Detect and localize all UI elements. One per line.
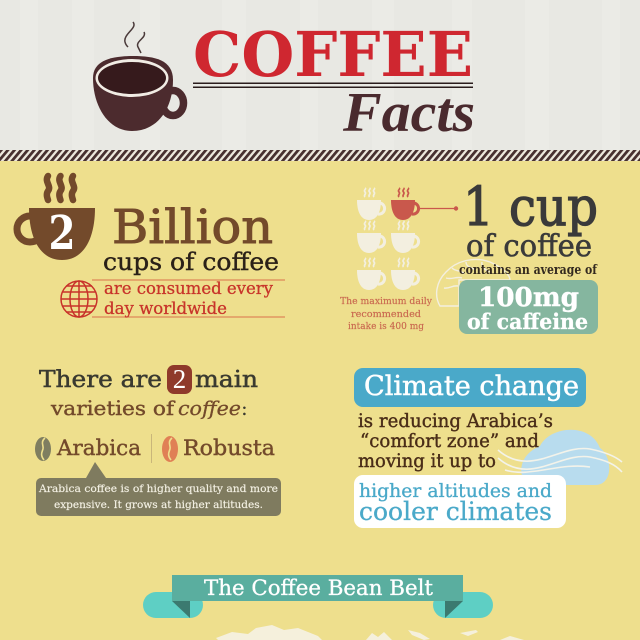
- text: varieties of coffee: :: [241, 396, 248, 420]
- callout: Arabica description: [36, 462, 281, 516]
- heading: There are 2 main: There are: [39, 367, 162, 393]
- text: reducing comfort zone: [358, 410, 553, 472]
- connector arrow: [420, 206, 458, 211]
- panel: 2 billion cups: [17, 176, 285, 319]
- icon: brown cup with number 2: [17, 176, 95, 261]
- banner: The Coffee Bean Belt: [143, 575, 493, 618]
- heading: There are 2 main: 2: [173, 364, 186, 394]
- icon: robusta bean: [162, 436, 178, 462]
- rules: [92, 280, 285, 317]
- callout: 100mg of caffeine: [459, 280, 598, 334]
- text: varieties of coffee: varieties of: [50, 396, 176, 420]
- text: varieties of coffee: coffee: [178, 396, 241, 420]
- text: reducing comfort zone: is reducing Arabica’s: [358, 410, 553, 432]
- text: are consumed every day worldwide: day worldwide: [104, 299, 227, 319]
- hatched divider: [0, 150, 640, 161]
- title: Facts: Facts: [342, 82, 475, 144]
- text: of coffee: of coffee: [466, 229, 592, 264]
- text: reducing comfort zone: “comfort zone” and: [360, 430, 539, 452]
- panel: 1 cup of coffee: [340, 177, 598, 334]
- text: are consumed every day worldwide: are consumed every: [104, 279, 273, 299]
- header band: [0, 0, 640, 150]
- icon: brown cup with number 2: 2: [48, 206, 76, 261]
- callout: higher altitudes: higher altitudes and: [359, 480, 552, 502]
- text: are consumed every day worldwide: [104, 279, 273, 319]
- heading: 1 cup: 1 cup: [463, 177, 598, 238]
- panel: climate change: [354, 368, 622, 528]
- world map: [216, 625, 524, 640]
- panel: 2 main varieties: [35, 364, 281, 516]
- text: maximum daily intake: The maximum daily: [340, 297, 433, 307]
- icon: brain outline: [437, 259, 510, 306]
- text: contains an average of: contains an average of: [459, 263, 598, 278]
- text: varieties of coffee: [50, 396, 248, 420]
- callout: higher altitudes: [354, 475, 566, 528]
- callout: higher altitudes: cooler climates: [359, 497, 552, 526]
- text: maximum daily intake: [340, 297, 433, 332]
- callout: 100mg of caffeine: 100mg: [478, 283, 579, 313]
- heading: There are 2 main: [39, 364, 258, 394]
- icon: globe: [61, 281, 97, 317]
- icon: six cup grid: [357, 188, 419, 290]
- label: Robusta: Robusta: [183, 436, 275, 460]
- icon: coffee cup with steam: [93, 22, 184, 131]
- icon: cloud with wind: [498, 430, 622, 485]
- heading: There are 2 main: main: [195, 367, 258, 393]
- heading: Billion: Billion: [112, 200, 273, 255]
- callout: 100mg of caffeine: of caffeine: [467, 309, 588, 334]
- text: maximum daily intake: recommended: [351, 310, 421, 320]
- callout: Arabica description: Arabica coffee is of higher quality and more: [38, 483, 278, 495]
- title: COFFEE: COFFEE: [193, 18, 473, 91]
- text: maximum daily intake: intake is 400 mg: [348, 322, 424, 332]
- callout: Arabica description: expensive. It grows at higher altitudes.: [54, 499, 263, 511]
- text: reducing comfort zone: moving it up to: [358, 450, 496, 472]
- label: Arabica: Arabica: [56, 436, 141, 460]
- heading: Climate change: Climate change: [364, 371, 579, 402]
- banner: The Coffee Bean Belt: The Coffee Bean Belt: [204, 576, 434, 600]
- icon: arabica bean: [35, 437, 51, 461]
- text: cups of coffee: cups of coffee: [103, 248, 279, 276]
